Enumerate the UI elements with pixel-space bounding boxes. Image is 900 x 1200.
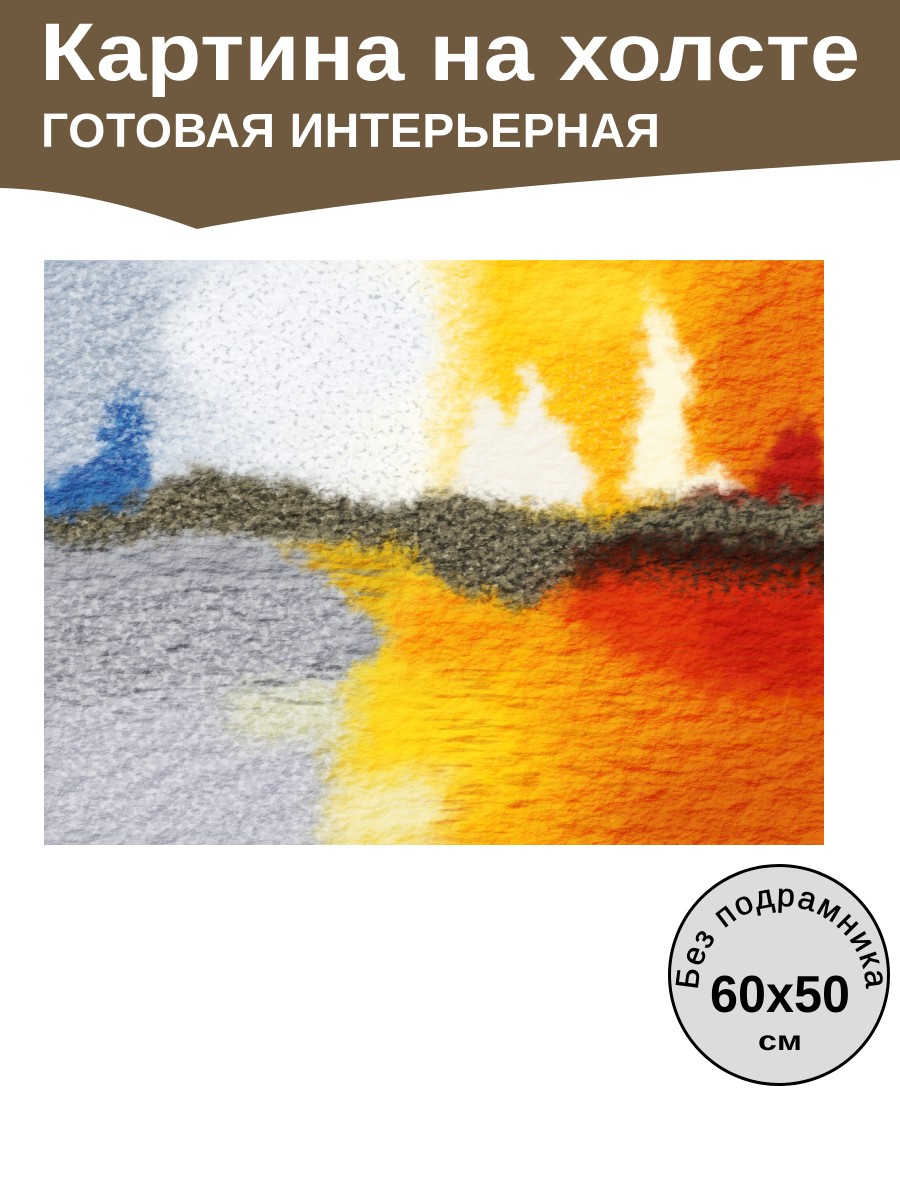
band dark speckle	[44, 468, 830, 610]
upper sky flecks	[44, 260, 430, 490]
lower grey horizontal strokes	[44, 550, 400, 720]
upper white flecks	[44, 260, 470, 470]
title: Картина на холсте	[40, 7, 860, 98]
lower white horizontal strokes	[44, 580, 360, 845]
badge curved text: Без подрамника	[676, 888, 883, 989]
badge: size and no stretcher	[668, 864, 890, 1086]
painting: abstract impasto canvas	[44, 260, 824, 845]
badge size: 60x50	[710, 966, 850, 1024]
band light speckle	[44, 468, 600, 600]
subtitle: ГОТОВАЯ ИНТЕРЬЕРНАЯ	[41, 105, 660, 158]
flame speckle	[470, 350, 710, 490]
dark textured band	[44, 468, 830, 610]
header banner	[0, 0, 900, 229]
impasto texture overlay	[44, 260, 824, 845]
badge unit: см	[758, 1025, 802, 1056]
warm orange strokes	[430, 620, 830, 850]
